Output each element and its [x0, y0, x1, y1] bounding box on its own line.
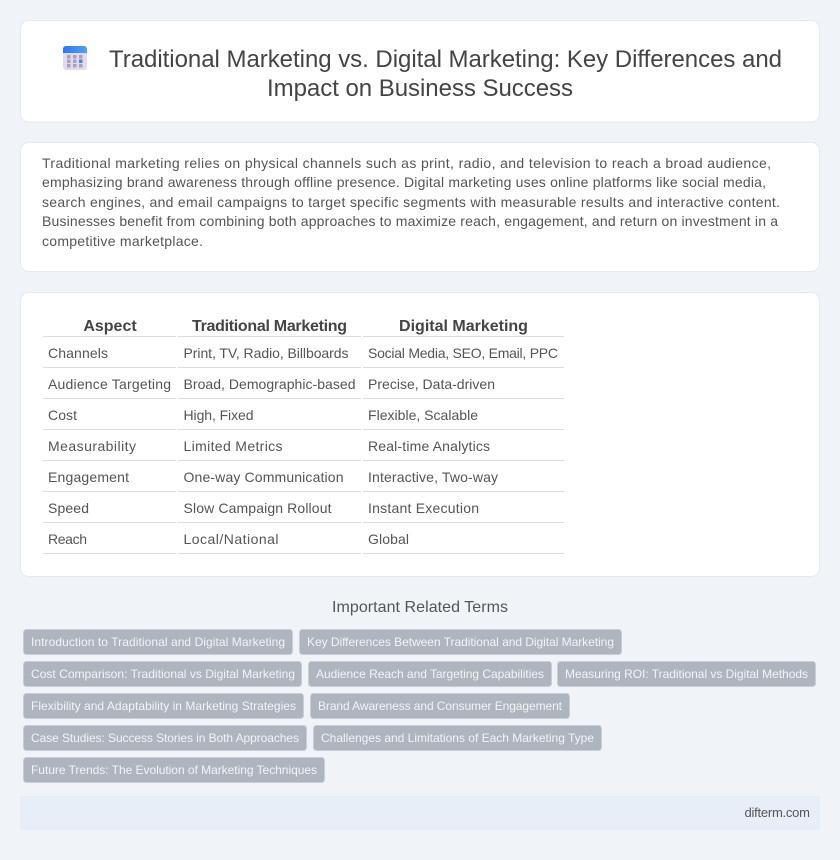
- footer: difterm.com: [744, 805, 810, 820]
- text block: introduction: Businesses benefit from combining both approaches to maximize reach, engagement, and return on investment in a: [42, 213, 778, 229]
- table row: measurability: Measurability: [48, 438, 136, 454]
- text block: introduction: [42, 155, 780, 249]
- table row: reach: Reach: [48, 531, 87, 547]
- table row: reach: Global: [368, 531, 409, 547]
- table row: audience targeting: Precise, Data-driven: [368, 376, 495, 392]
- table row: measurability: Limited Metrics: [184, 438, 282, 454]
- table row: cost: [48, 407, 478, 423]
- table row: speed: Speed: [48, 500, 89, 516]
- tag: Brand Awareness and Consumer Engagement: [318, 699, 563, 713]
- tag: Cost Comparison: Traditional vs Digital Marketing: [31, 667, 295, 681]
- tag: Measuring ROI: Traditional vs Digital Methods: [565, 667, 808, 681]
- tag: [24, 630, 292, 654]
- tag: [558, 662, 816, 686]
- table row: measurability: [48, 438, 490, 454]
- table row: engagement: Interactive, Two-way: [368, 469, 498, 485]
- table row: engagement: One-way Communication: [184, 469, 344, 485]
- tag: [24, 662, 302, 686]
- panel: introduction: [20, 142, 820, 272]
- panel: header: [20, 20, 820, 122]
- table header: [83, 318, 528, 335]
- text block: introduction: search engines, and email campaigns to target specific segments with measurable results and interactive content.: [42, 194, 780, 210]
- table row: channels: [48, 345, 558, 361]
- icon: calendar: [63, 46, 87, 70]
- table header: Traditional Marketing: [192, 318, 347, 335]
- table row: engagement: Engagement: [48, 469, 129, 485]
- tag: [24, 726, 306, 750]
- table row: channels: Print, TV, Radio, Billboards: [184, 345, 348, 361]
- text block: introduction: Traditional marketing relies on physical channels such as print, radio, and television to reach a broad audience,: [42, 155, 771, 171]
- table row: channels: Social Media, SEO, Email, PPC: [368, 345, 558, 361]
- table row: reach: [48, 531, 409, 547]
- table row: measurability: Real-time Analytics: [368, 438, 490, 454]
- tag: [310, 694, 570, 718]
- table header: Aspect: [83, 318, 137, 335]
- tag: Audience Reach and Targeting Capabilities: [316, 667, 544, 681]
- title: Traditional Marketing vs. Digital Marketing: Key Differences and: [109, 46, 782, 73]
- tag: Key Differences Between Traditional and Digital Marketing: [307, 635, 614, 649]
- title: Impact on Business Success: [267, 75, 573, 102]
- tag: Case Studies: Success Stories in Both Approaches: [31, 731, 299, 745]
- table row: reach: Local/National: [184, 531, 278, 547]
- tag: Introduction to Traditional and Digital Marketing: [31, 635, 285, 649]
- tag: [24, 694, 304, 718]
- text block: introduction: competitive marketplace.: [42, 233, 203, 249]
- tag: Challenges and Limitations of Each Marketing Type: [321, 731, 594, 745]
- table row: cost: Cost: [48, 407, 77, 423]
- text block: introduction: emphasizing brand awareness through offline presence. Digital marketing uses online platforms like social media,: [42, 174, 766, 190]
- heading: important related terms: Important Related Terms: [332, 599, 508, 616]
- panel: comparison table: [20, 292, 820, 576]
- table row: speed: [48, 500, 479, 516]
- table row: channels: Channels: [48, 345, 108, 361]
- table row: cost: High, Fixed: [184, 407, 254, 423]
- tag: [314, 726, 602, 750]
- table row: audience targeting: [48, 376, 495, 392]
- tag: [300, 630, 622, 654]
- table row: speed: Slow Campaign Rollout: [184, 500, 332, 516]
- tag: Future Trends: The Evolution of Marketing Techniques: [31, 763, 317, 777]
- tag: Flexibility and Adaptability in Marketing Strategies: [31, 699, 296, 713]
- table row: cost: Flexible, Scalable: [368, 407, 478, 423]
- title: [109, 46, 782, 102]
- table row: speed: Instant Execution: [368, 500, 479, 516]
- table header: Digital Marketing: [399, 318, 528, 335]
- tags: related terms: [24, 630, 816, 782]
- footer: [20, 796, 820, 830]
- tag: [24, 758, 324, 782]
- table row: engagement: [48, 469, 498, 485]
- table row: audience targeting: Audience Targeting: [48, 376, 171, 392]
- tag: [308, 662, 552, 686]
- table row: audience targeting: Broad, Demographic-based: [184, 376, 356, 392]
